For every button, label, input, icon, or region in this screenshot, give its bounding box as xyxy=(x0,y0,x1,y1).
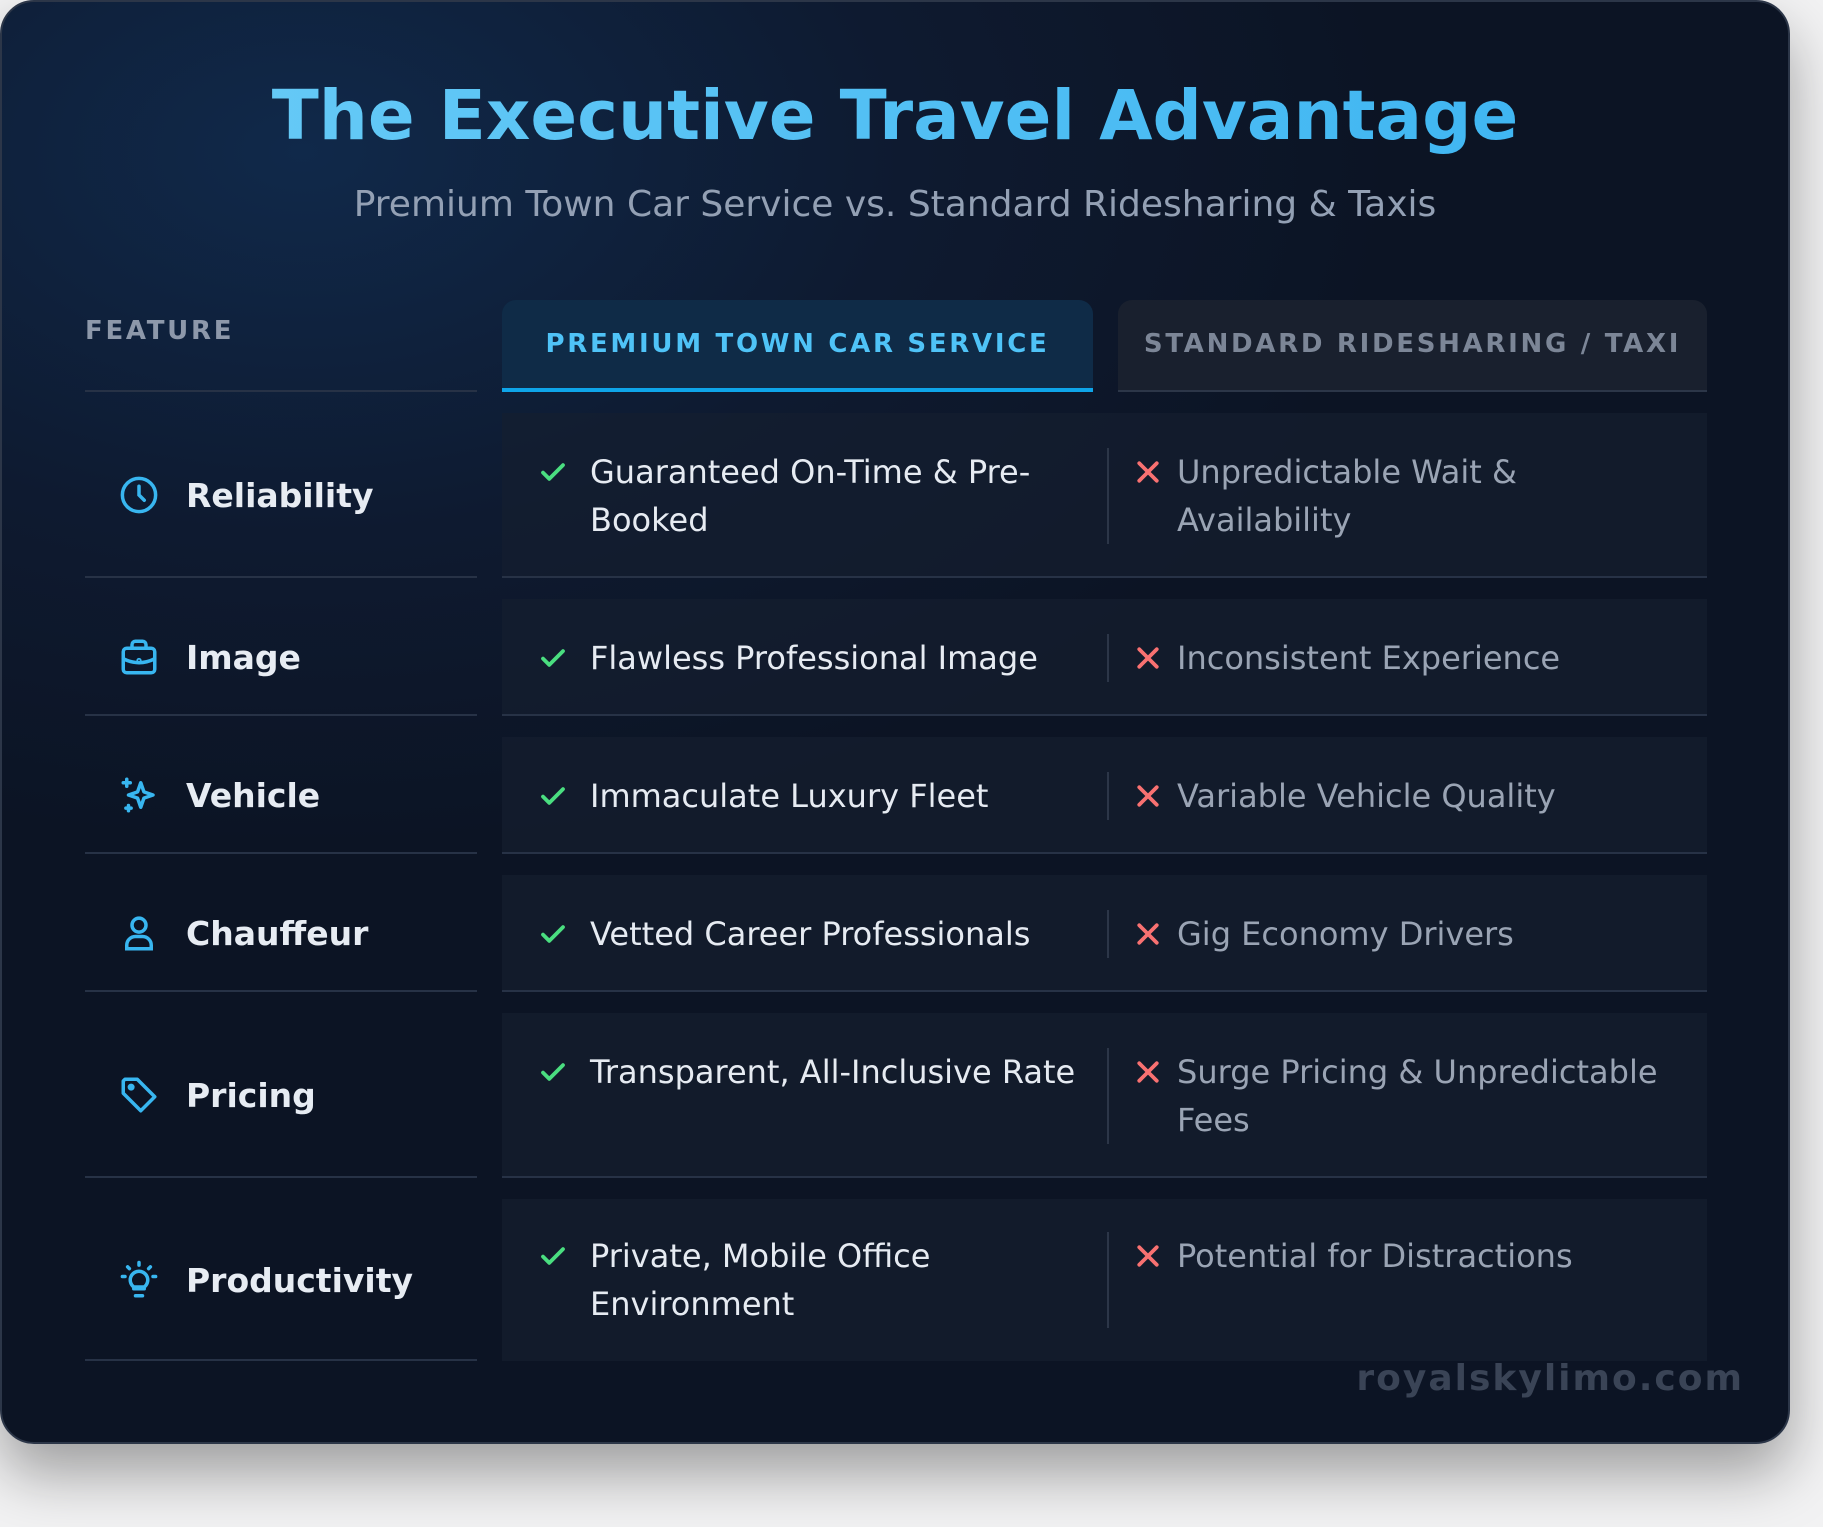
subtitle: Premium Town Car Service vs. Standard Ridesharing & Taxis xyxy=(354,184,1436,225)
feature: pricing xyxy=(122,1076,316,1114)
row: pricing: Surge Pricing & Unpredictable xyxy=(1177,1052,1658,1090)
title: The Executive Travel Advantage xyxy=(272,76,1518,156)
row: reliability: Availability xyxy=(1177,500,1351,538)
row: reliability xyxy=(541,448,1517,544)
row: vehicle: Variable Vehicle Quality xyxy=(1177,776,1556,814)
row: image: Inconsistent Experience xyxy=(1177,638,1560,676)
row: productivity xyxy=(541,1232,1573,1328)
row: image: Flawless Professional Image xyxy=(590,638,1038,676)
title xyxy=(0,76,1790,156)
feature: chauffeur: Chauffeur xyxy=(186,914,368,952)
row: pricing: Transparent, All-Inclusive Rate xyxy=(590,1052,1075,1090)
row: image xyxy=(541,634,1560,682)
row: vehicle: Immaculate Luxury Fleet xyxy=(590,776,988,814)
feature: productivity: Productivity xyxy=(186,1260,413,1300)
header: feature: FEATURE xyxy=(85,316,234,346)
row: chauffeur xyxy=(541,910,1514,958)
row: reliability: Guaranteed On-Time & Pre- xyxy=(590,452,1030,490)
row: productivity: Potential for Distractions xyxy=(1177,1237,1573,1275)
row: chauffeur: Vetted Career Professionals xyxy=(590,914,1030,952)
feature: pricing: Pricing xyxy=(186,1076,316,1114)
feature: reliability: Reliability xyxy=(186,476,374,514)
feature: image xyxy=(121,638,301,676)
header: premium xyxy=(502,300,1093,392)
row: reliability: Unpredictable Wait & xyxy=(1177,452,1517,490)
watermark: royalskylimo.com xyxy=(1356,1358,1744,1399)
row: pricing xyxy=(541,1048,1658,1144)
header: standard xyxy=(1118,300,1707,392)
row: reliability: Booked xyxy=(590,500,708,538)
feature: vehicle: Vehicle xyxy=(186,776,320,814)
feature: image: Image xyxy=(186,638,301,676)
row: productivity: Environment xyxy=(590,1285,794,1323)
header: premium: PREMIUM TOWN CAR SERVICE xyxy=(546,329,1049,359)
feature: vehicle xyxy=(122,776,320,814)
row: chauffeur: Gig Economy Drivers xyxy=(1177,914,1514,952)
row: vehicle xyxy=(541,772,1556,820)
header: standard: STANDARD RIDESHARING / TAXI xyxy=(1144,329,1681,359)
row: pricing: Fees xyxy=(1177,1100,1250,1138)
row: productivity: Private, Mobile Office xyxy=(590,1237,930,1275)
